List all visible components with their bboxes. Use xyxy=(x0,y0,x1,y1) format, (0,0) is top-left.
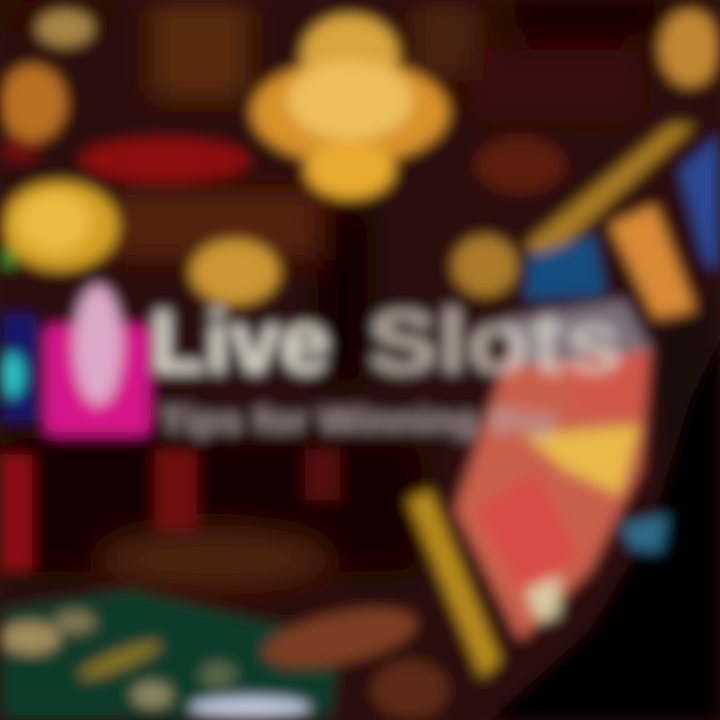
hand xyxy=(259,597,448,720)
chandelier: top right xyxy=(660,10,720,86)
chandelier: upper left xyxy=(0,10,93,141)
wheel segments xyxy=(455,135,720,640)
wheel shadow xyxy=(490,290,720,720)
table and chips xyxy=(0,590,340,720)
slot machines xyxy=(0,250,150,435)
chandelier: right xyxy=(453,236,517,296)
chandelier: mid left xyxy=(2,182,118,270)
chandelier: mid xyxy=(191,240,279,304)
chandelier: center xyxy=(252,15,448,198)
subtitle text: Tips for Winning Big xyxy=(160,402,555,440)
title text: Slots xyxy=(368,292,623,391)
wheel rim xyxy=(408,125,695,678)
chips xyxy=(0,611,236,708)
title text xyxy=(150,292,623,391)
title text: Live xyxy=(150,292,330,391)
red curtains xyxy=(0,136,565,570)
